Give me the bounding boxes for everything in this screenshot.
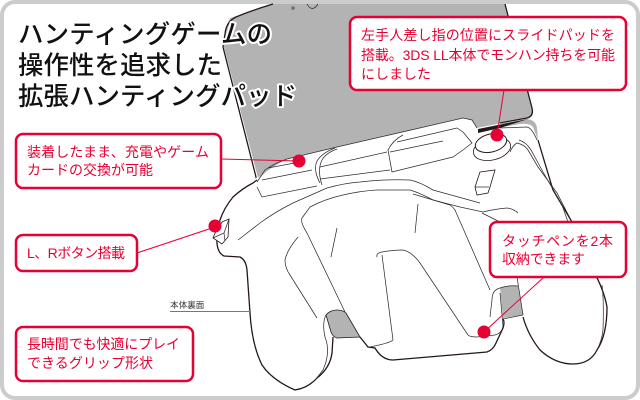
small button <box>475 170 495 195</box>
rear-side label with leader <box>170 299 250 312</box>
title: 拡張ハンティングパッド <box>18 83 297 111</box>
callout: slide pad: 搭載。3DS LL本体でモンハン持ちを可能 <box>361 47 615 63</box>
title <box>18 21 297 111</box>
callout: card swap <box>16 134 306 188</box>
callout: card swap: 装着したまま、充電やゲーム <box>27 144 209 160</box>
callout: grip shape <box>16 327 193 381</box>
right underside pad <box>500 286 523 318</box>
callout: slide pad: 左手人差し指の位置にスライドパッドを <box>361 27 615 43</box>
callout: slide pad <box>350 17 626 142</box>
console screen lid <box>224 4 532 178</box>
L/R button <box>213 219 229 244</box>
callout: touch pen storage: タッチペンを2本 <box>502 233 613 249</box>
callout: card swap: カードの交換が可能 <box>27 162 153 178</box>
callout: grip shape: できるグリップ形状 <box>27 355 153 371</box>
illustration: hunting pad on console <box>213 4 607 390</box>
callout: slide pad: にしました <box>361 66 431 82</box>
lid details <box>292 7 294 9</box>
callout: touch pen storage <box>478 222 626 338</box>
callout: L and R buttons: L、Rボタン搭載 <box>27 245 125 261</box>
slide pad <box>471 119 572 222</box>
rear-side label with leader: 本体裏面 <box>170 299 205 310</box>
callout: grip shape: 長時間でも快適にプレイ <box>27 336 180 352</box>
grip contour lines <box>238 180 480 240</box>
pad body outline <box>217 120 607 390</box>
title: 操作性を追求した <box>18 52 222 80</box>
title: ハンティングゲームの <box>18 21 272 49</box>
shoulder pads on top <box>257 118 477 197</box>
callout: L and R buttons <box>16 220 222 271</box>
callout: touch pen storage: 収納できます <box>502 251 585 267</box>
left underside pad <box>326 310 360 338</box>
